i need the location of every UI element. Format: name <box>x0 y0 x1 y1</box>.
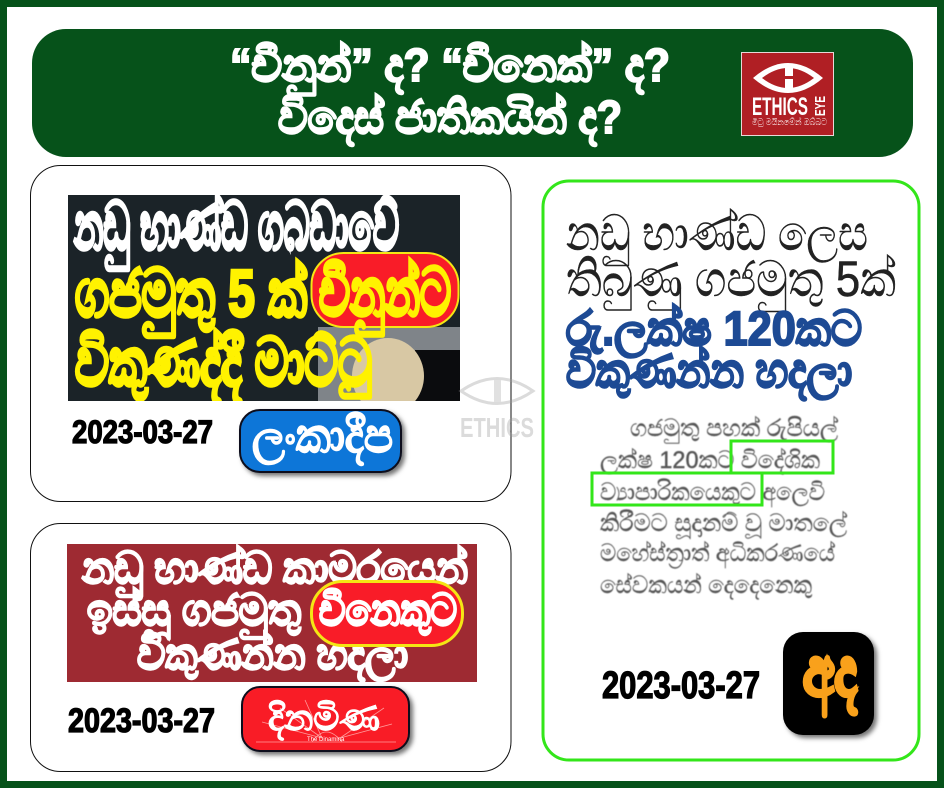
headline image: Lankadeepa: විකුණද්දී මාට්ටු <box>75 325 372 405</box>
watermark <box>460 378 534 443</box>
article text: ගජමුතු පහක් රුපියල් <box>630 415 838 443</box>
headline: Ada: නඩු භාණ්ඩ ලෙස <box>566 205 868 265</box>
headline image: Dinamina: ඉස්සූ ගජමුතු <box>87 586 301 640</box>
highlight box: විදේශික <box>731 441 833 473</box>
panel: Dinamina <box>30 524 511 772</box>
logo: Ethics Eye <box>742 52 834 136</box>
panel: Ada <box>543 181 919 760</box>
date: 2023-03-27 <box>602 665 760 707</box>
highlight pill: චීනෙකුට <box>312 582 462 646</box>
article text: ව්‍යාපාරිකයෙකුට අලෙවි <box>600 479 825 508</box>
logo: Dinamina: දිනමිණ <box>268 697 380 741</box>
logo: Dinamina <box>242 687 409 751</box>
photo: gem <box>318 327 460 401</box>
headline image: Lankadeepa: නඩු භාණ්ඩ ගබඩාවේ <box>74 189 399 271</box>
title: “චීනුන්” ද? “චීනෙක්” ද? <box>230 39 670 97</box>
article text: ලක්ෂ 120කට විදේශික <box>600 447 820 475</box>
article text: සේවකයන් දෙදෙනෙකු <box>600 572 812 600</box>
title: විදෙස් ජාතිකයින් ද? <box>278 91 622 147</box>
highlight pill: චීනුන්ට: චීනුන්ට <box>319 255 451 337</box>
headline image: Dinamina: නඩු භාණ්ඩ කාමරයෙන් <box>82 544 468 598</box>
headline: Ada: තිබුණු ගජමුතු 5ක් <box>566 251 896 311</box>
headline: Ada <box>566 205 896 401</box>
date: 2023-03-27 <box>72 414 213 450</box>
logo: Ada: අද <box>803 634 858 717</box>
headline: Ada: විකුණන්න හදලා <box>566 345 852 401</box>
highlight box: ව්‍යාපාරිකයෙකුට <box>592 473 762 505</box>
logo: Ethics Eye: ETHICS <box>752 93 808 121</box>
logo: Dinamina: The Dinamina <box>307 737 345 743</box>
panel: Lankadeepa <box>30 166 511 502</box>
headline image: Lankadeepa: ගජමුතු 5 ක් <box>75 256 307 338</box>
header banner <box>32 29 913 157</box>
article text <box>600 415 847 600</box>
highlight pill: චීනුන්ට <box>312 253 458 337</box>
headline image: Dinamina <box>67 544 477 682</box>
article text: කිරීමට සූදානම් වූ මාතලේ <box>600 510 847 538</box>
date: 2023-03-27 <box>68 702 215 740</box>
watermark: ETHICS <box>460 412 534 443</box>
article text: මහේස්ත්‍රාත් අධිකරණයේ <box>600 540 835 569</box>
logo: Ethics Eye: මිටු මයිනමේන් ඔබ්බට <box>752 117 827 127</box>
logo: Ada <box>783 632 874 735</box>
logo: Lankadeepa: ලංකාදීප <box>252 410 393 466</box>
headline image: Dinamina: විකුණන්න හදලා <box>137 630 408 682</box>
title <box>230 39 670 147</box>
headline image: Lankadeepa <box>68 189 460 414</box>
highlight pill: චීනෙකුට: චීනෙකුට <box>319 586 457 635</box>
logo: Ethics Eye: EYE <box>812 96 829 116</box>
headline: Ada: රු.ලක්ෂ 120කට <box>566 303 862 358</box>
